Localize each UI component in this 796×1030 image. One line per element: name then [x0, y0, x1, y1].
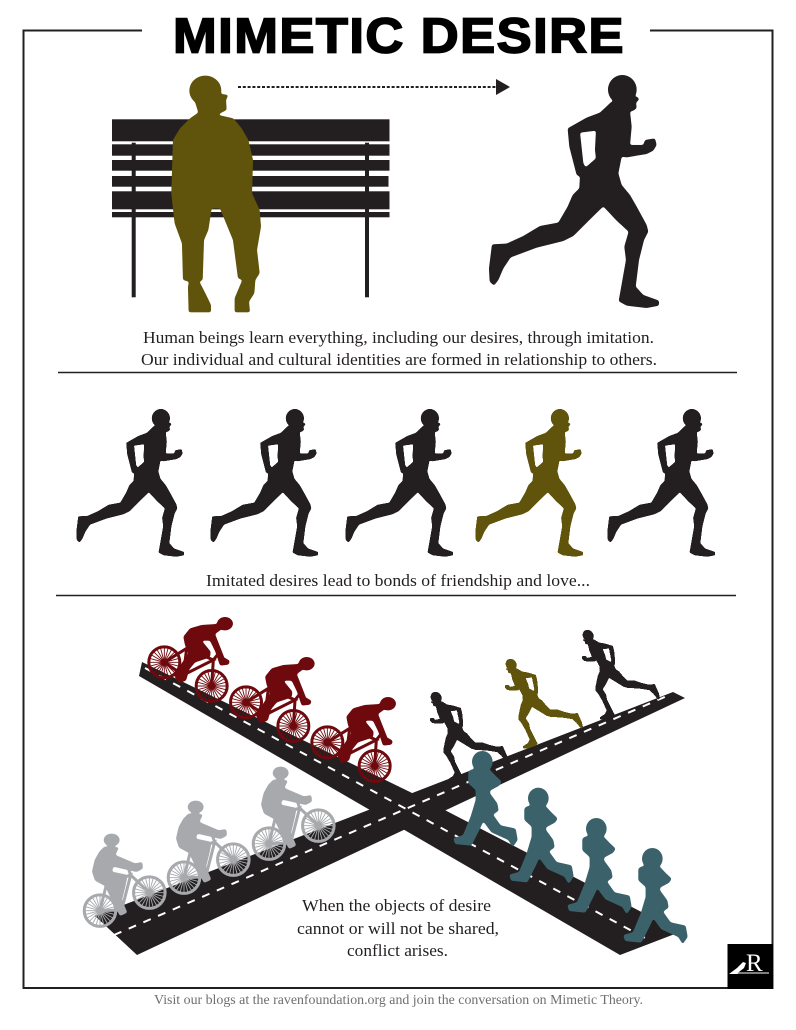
teal women runners [453, 751, 688, 944]
caption: imitation: Human beings learn everything, including our desires, through imitation. [143, 328, 654, 347]
arrow: gaze from seated figure to runner [238, 79, 510, 95]
caption: friendship: Imitated desires lead to bonds of friendship and love... [206, 571, 590, 590]
title: MIMETIC DESIRE [173, 8, 623, 63]
logo: Raven Foundation [728, 944, 773, 989]
footer: Visit our blogs at the ravenfoundation.org and join the conversation on Mimetic Theory. [154, 992, 643, 1007]
caption: conflict: cannot or will not be shared, [297, 919, 499, 938]
crossing roads [95, 662, 685, 955]
large black runner [489, 75, 659, 308]
caption: conflict [297, 896, 499, 960]
icon: park bench [112, 119, 390, 297]
logo: Raven Foundation: R [746, 950, 763, 977]
row of five runners [76, 409, 715, 557]
caption: imitation: Our individual and cultural identities are formed in relationship to others. [141, 350, 657, 369]
gray cyclists [84, 767, 335, 927]
caption: conflict: conflict arises. [347, 941, 448, 960]
seated olive figure [171, 76, 261, 312]
runners on the road [421, 620, 663, 782]
caption: imitation [141, 328, 657, 369]
red cyclists [148, 617, 396, 782]
caption: conflict: When the objects of desire [302, 896, 491, 915]
